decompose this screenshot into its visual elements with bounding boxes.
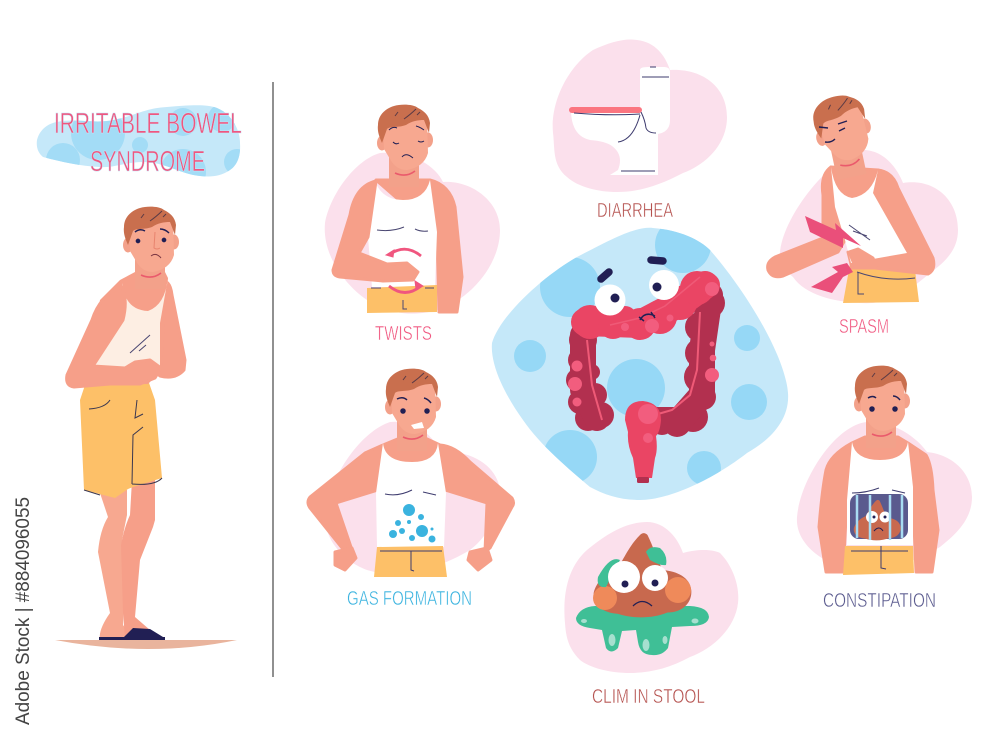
ground shadow (55, 640, 237, 649)
panel: constipation (797, 366, 972, 612)
fist: left (335, 548, 356, 570)
legs (98, 490, 135, 640)
front arm and hands (67, 287, 161, 387)
colon illustration (566, 271, 725, 483)
icon: pain bolts (805, 216, 861, 293)
icon: gas bubbles (389, 504, 436, 542)
sandal (99, 628, 165, 640)
panel: clim in stool (564, 522, 738, 708)
figure: standing man (55, 207, 237, 649)
head (854, 366, 910, 448)
arrows: twisting (386, 249, 423, 292)
face (397, 398, 431, 413)
pink blob (564, 522, 738, 673)
panel: diarrhea (553, 39, 727, 222)
pink blob (325, 153, 500, 314)
title text: IRRITABLE BOWEL (54, 108, 242, 140)
face (819, 121, 847, 142)
face (389, 126, 424, 158)
panel: spasm (768, 90, 958, 338)
colon face (594, 260, 679, 321)
label: CLIM IN STOOL (592, 685, 705, 708)
pink blob (797, 422, 972, 570)
man body (768, 167, 934, 303)
label: CONSTIPATION (823, 589, 936, 612)
panel: gas formation (308, 369, 514, 610)
pink blob (325, 422, 500, 574)
label: DIARRHEA (597, 199, 673, 222)
man body (308, 438, 514, 577)
stock credit: Adobe Stock | #884096055 (13, 497, 34, 725)
head (123, 207, 179, 289)
face (135, 229, 169, 258)
mouth (411, 422, 424, 429)
label: SPASM (839, 315, 889, 338)
blue blob (492, 217, 788, 500)
head (385, 369, 441, 451)
icon: toilet (569, 67, 670, 175)
panel: title (36, 105, 242, 176)
label: TWISTS (375, 322, 432, 345)
man body (333, 180, 462, 313)
pink blob (553, 39, 727, 192)
panel: twists (325, 105, 500, 345)
face (868, 396, 900, 411)
panel: colon (492, 217, 788, 500)
head (808, 90, 880, 183)
pink blob (780, 150, 958, 303)
title background blob (36, 105, 240, 176)
divider line (272, 82, 274, 677)
icon: poop behind bars (850, 494, 908, 540)
icon: poop with slime (576, 533, 709, 655)
head (377, 105, 433, 187)
fist: right (468, 548, 491, 570)
shorts (80, 380, 162, 498)
torso (90, 272, 168, 385)
title text: SYNDROME (90, 146, 205, 178)
man body (819, 437, 938, 575)
back arm (155, 281, 185, 377)
label: GAS FORMATION (347, 587, 472, 610)
tank top (93, 278, 168, 383)
